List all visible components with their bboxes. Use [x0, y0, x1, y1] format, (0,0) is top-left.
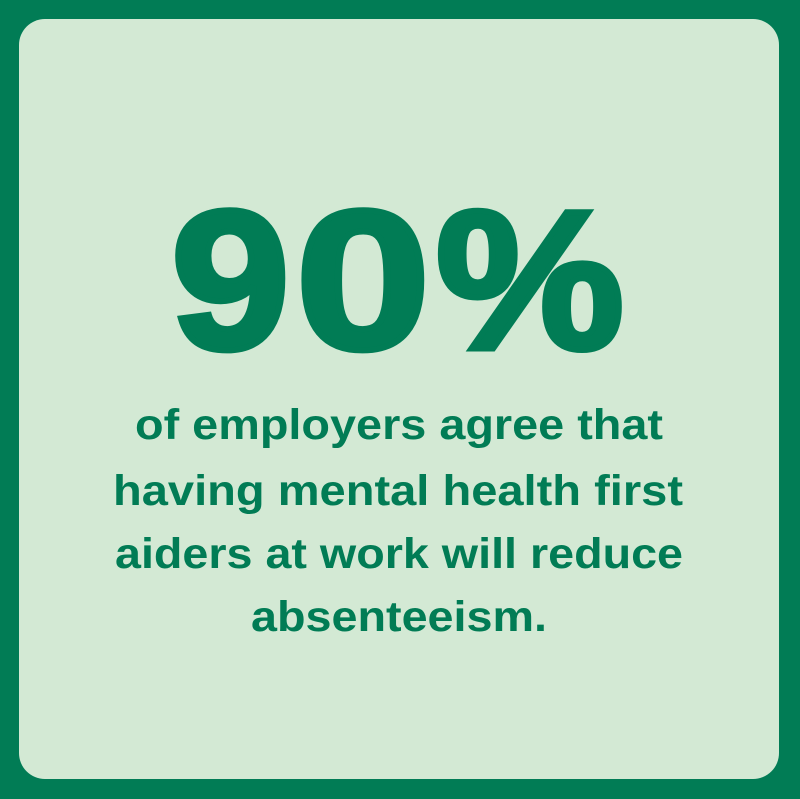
text block: statistic description: of employers agree that: [135, 401, 663, 449]
heading: 90%: 9: [171, 169, 290, 391]
heading: 90%: 0: [295, 169, 431, 391]
text block: statistic description: aiders at work will reduce: [115, 530, 683, 578]
heading: 90%: [171, 169, 624, 391]
text block: statistic description: [113, 401, 683, 641]
heading: 90%: %: [436, 170, 624, 391]
text block: statistic description: having mental health first: [113, 467, 683, 515]
text block: statistic description: absenteeism.: [251, 593, 547, 641]
